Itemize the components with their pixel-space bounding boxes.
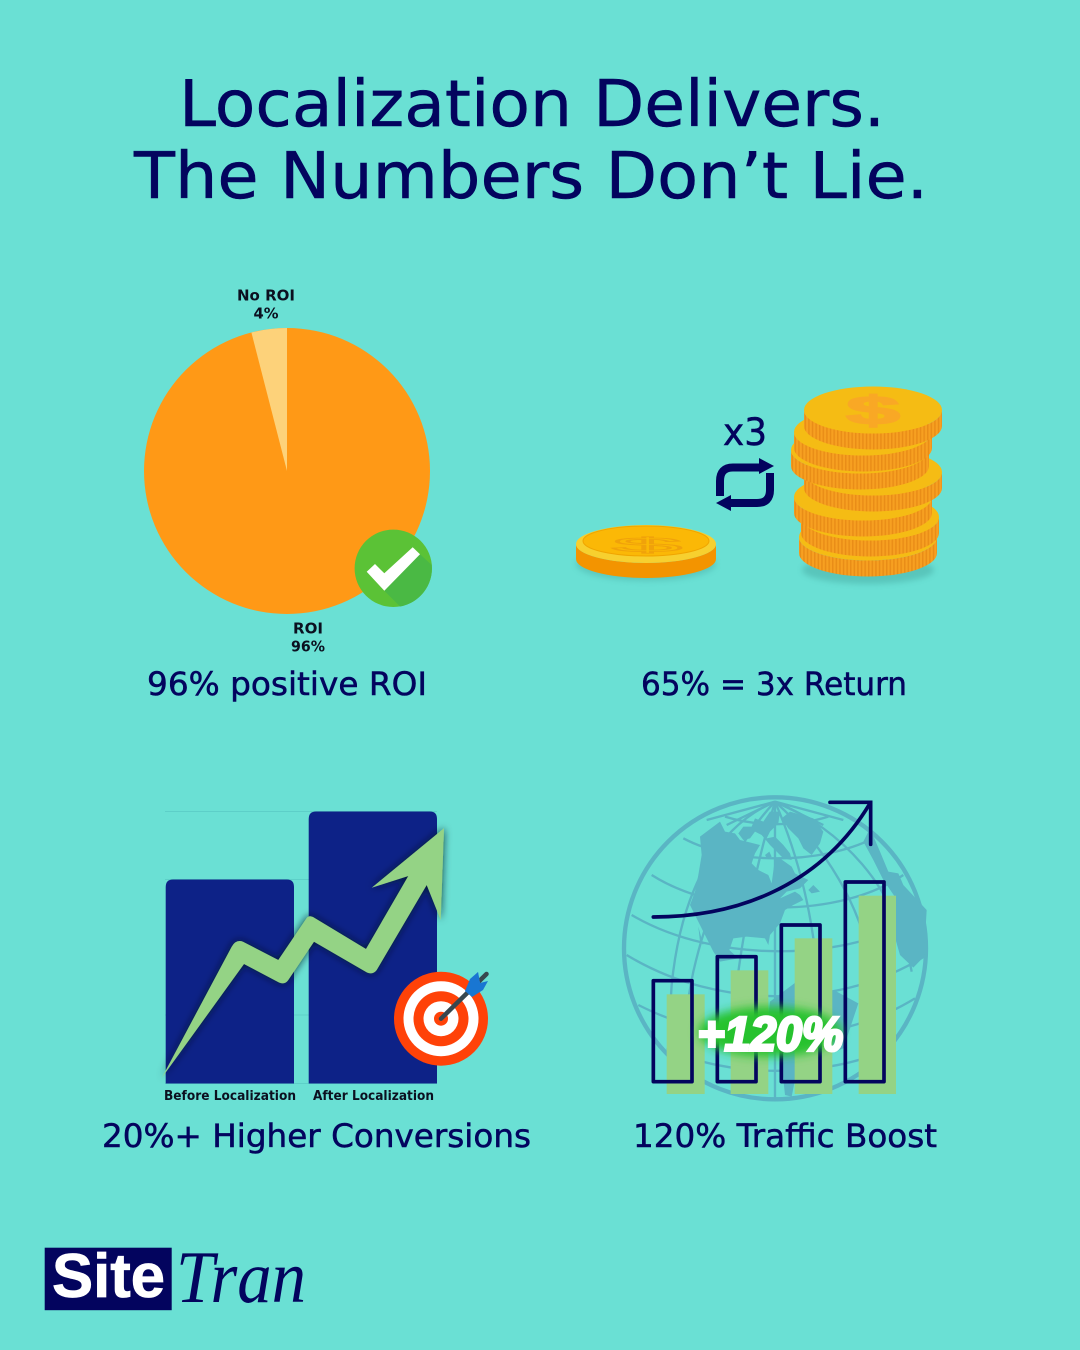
title bbox=[133, 68, 928, 214]
label: No ROI: No ROI bbox=[237, 286, 295, 304]
axis label: after: After Localization bbox=[313, 1088, 434, 1104]
label: No ROI: 4% bbox=[254, 304, 278, 322]
panel: conversions bar chart bbox=[162, 812, 488, 1104]
pie slice: No ROI 4% bbox=[251, 328, 287, 471]
bars: green rising columns bbox=[667, 896, 896, 1094]
label: ROI bbox=[291, 620, 325, 656]
arrow: rising green trend bbox=[162, 828, 444, 1078]
logo: SiteTran: Site bbox=[52, 1242, 165, 1311]
arrow: growth curve bbox=[653, 802, 871, 917]
icon: globe bbox=[624, 797, 927, 1099]
panel: traffic boost globe chart bbox=[624, 797, 927, 1099]
logo: SiteTran bbox=[45, 1237, 306, 1319]
icon: green check badge bbox=[355, 530, 432, 607]
icon: target with dart bbox=[394, 972, 488, 1066]
bar: after localization bbox=[309, 812, 437, 1084]
icon: repeat arrows bbox=[716, 458, 774, 511]
icon: single coin: $ bbox=[612, 535, 682, 557]
label: +120%: +120% bbox=[697, 1007, 843, 1061]
bar: before localization bbox=[166, 880, 294, 1084]
caption: 96% positive ROI: 96% positive ROI bbox=[147, 665, 427, 703]
label: ROI: ROI bbox=[293, 620, 323, 638]
label: x3: x3 bbox=[723, 411, 767, 454]
label: ROI: 96% bbox=[291, 638, 325, 656]
axis label: before: Before Localization bbox=[164, 1088, 296, 1104]
title: Localization Delivers. bbox=[179, 68, 885, 142]
panel: coins illustration bbox=[576, 386, 942, 584]
pie slice: ROI 96% bbox=[144, 328, 430, 614]
logo: SiteTran: Tran bbox=[176, 1237, 306, 1319]
bars: navy outlines bbox=[653, 882, 884, 1082]
label: No ROI bbox=[237, 286, 295, 322]
title: The Numbers Don’t Lie. bbox=[133, 140, 928, 214]
panel: ROI pie chart bbox=[144, 286, 432, 656]
icon: coin stack: $ bbox=[846, 389, 900, 433]
icon: single coin bbox=[576, 525, 716, 581]
glow behind +120% bbox=[698, 1007, 842, 1057]
caption: 65% = 3x Return: 65% = 3x Return bbox=[641, 665, 907, 703]
icon: coin stack bbox=[791, 386, 942, 584]
caption: 120% Traffic Boost: 120% Traffic Boost bbox=[633, 1117, 937, 1155]
caption: 20%+ Higher Conversions: 20%+ Higher Conversions bbox=[102, 1117, 531, 1155]
